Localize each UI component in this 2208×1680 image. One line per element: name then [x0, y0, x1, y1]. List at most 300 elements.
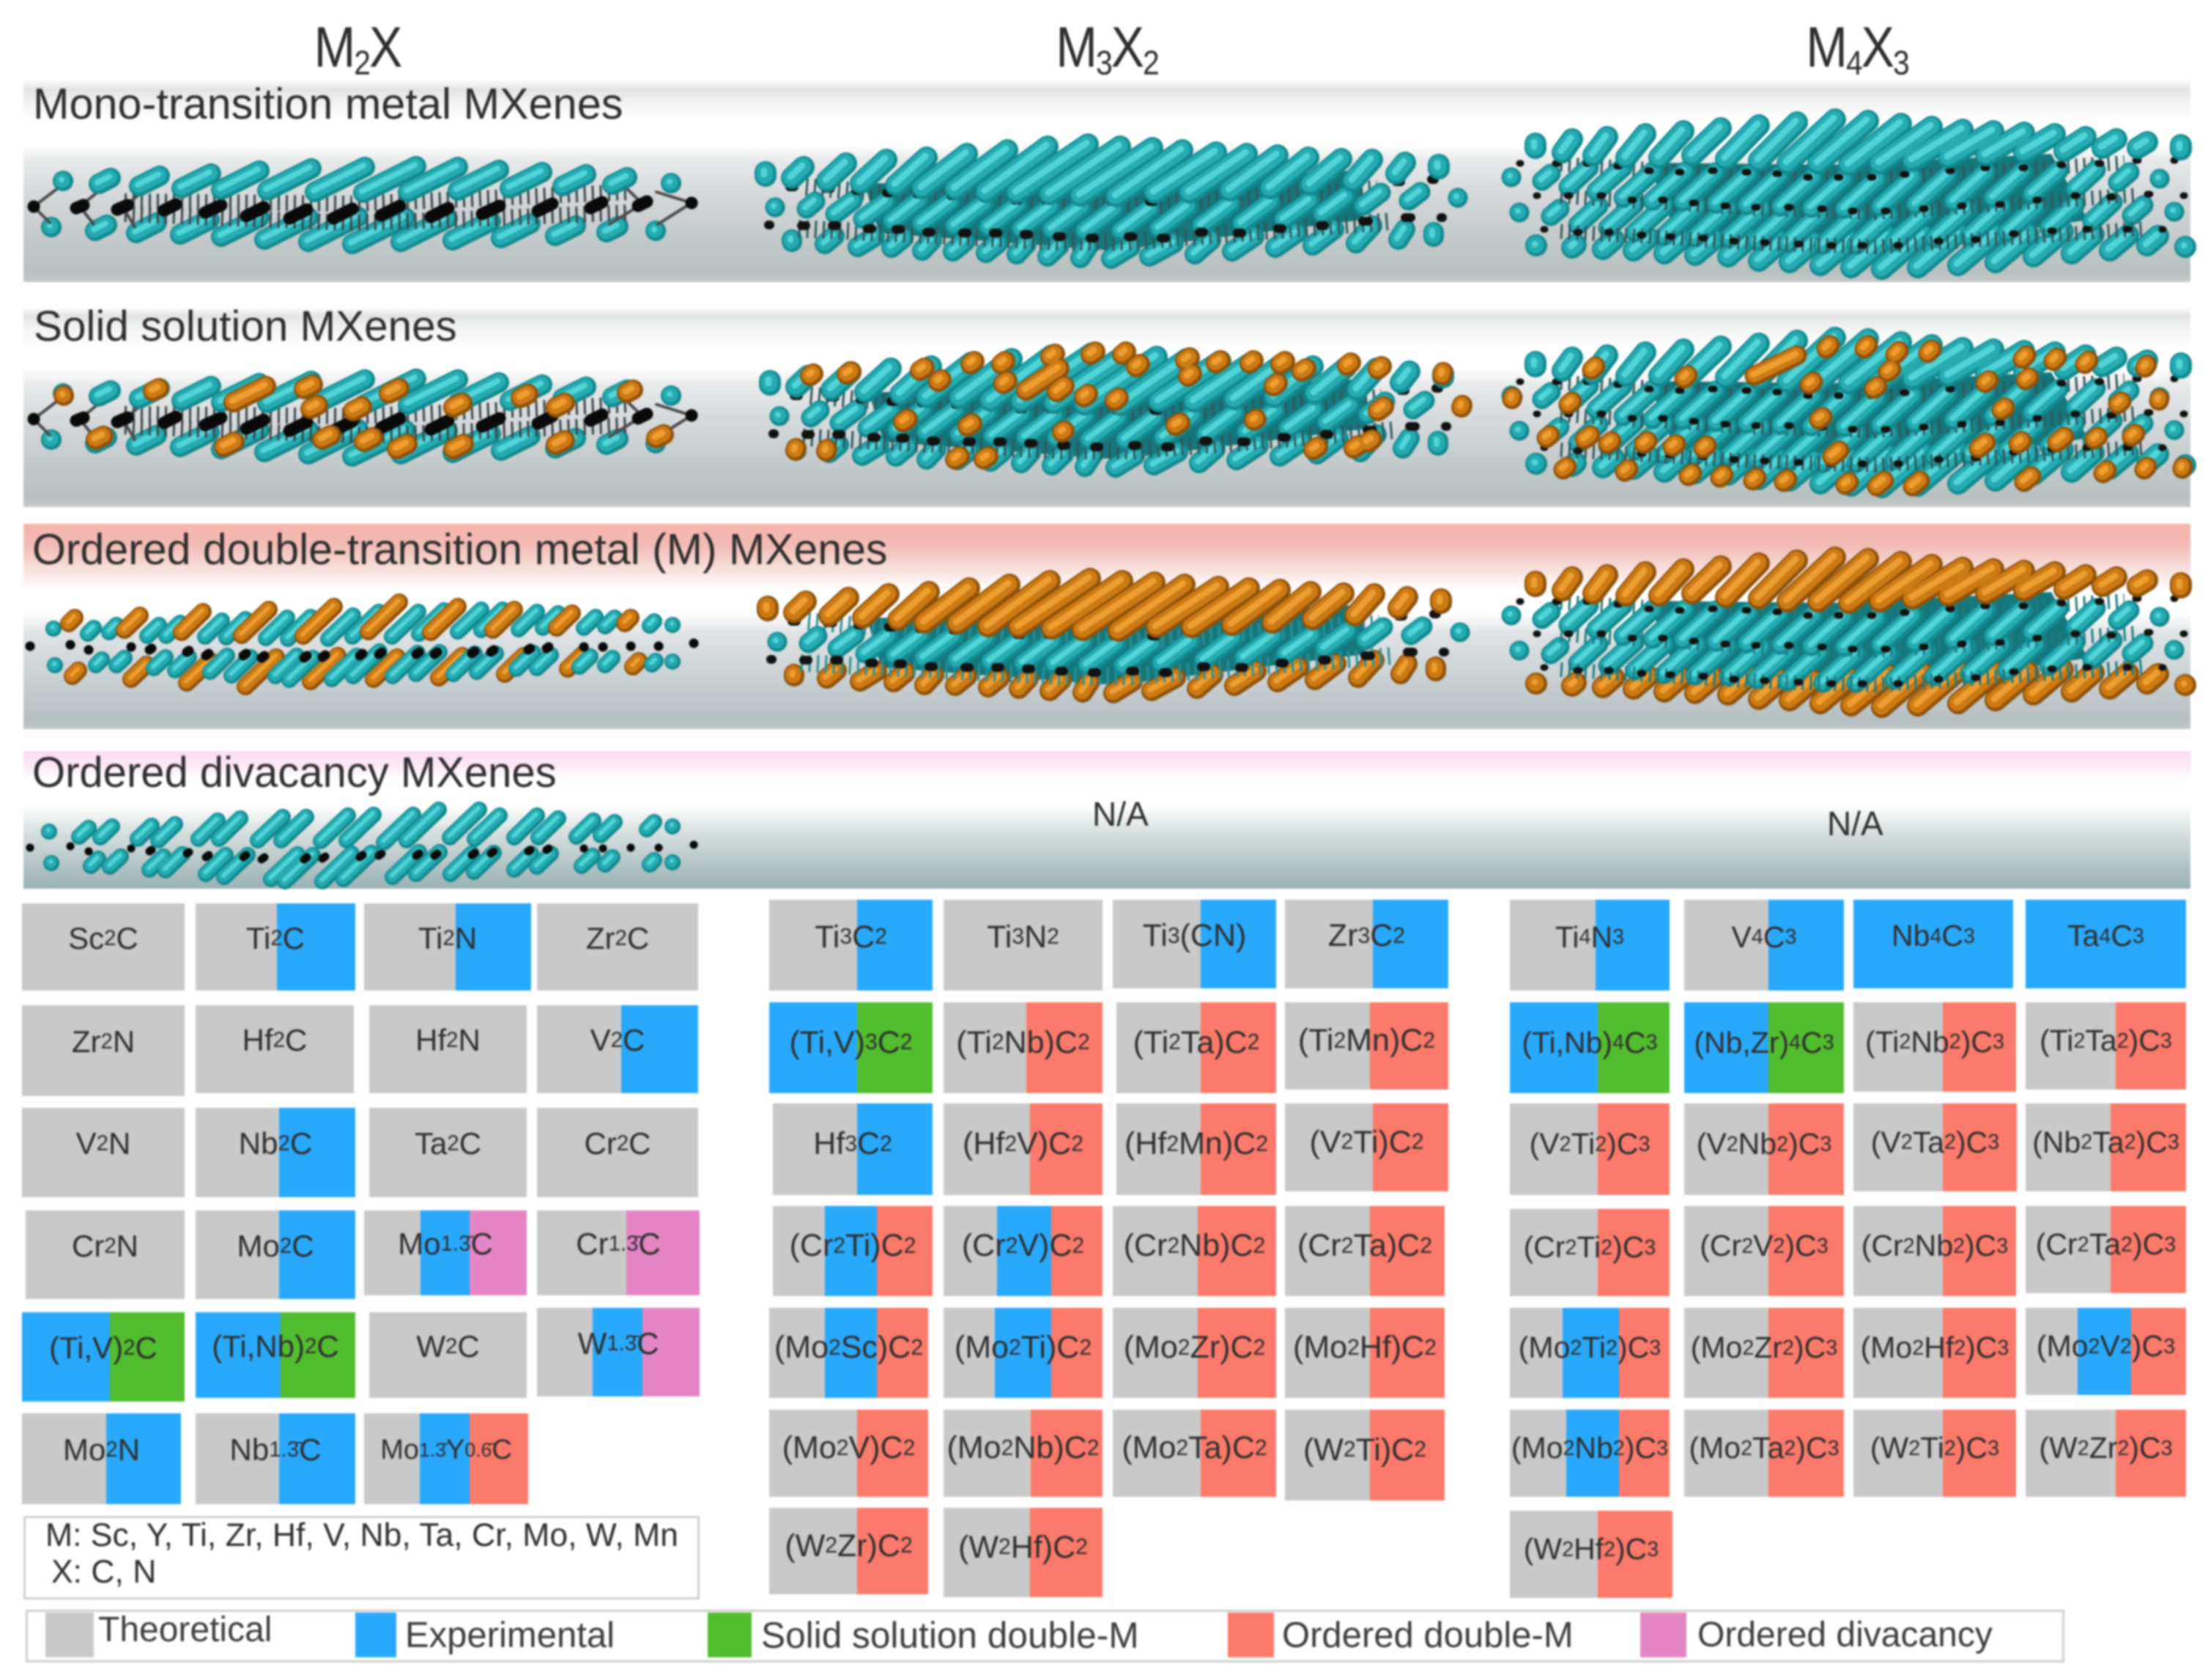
- cell (Cr2Ta2)C3: [2026, 1206, 2186, 1293]
- cell V2C: [537, 1005, 698, 1093]
- cell (Ti,Nb)4C3: (Ti,Nb) C: [1522, 1026, 1646, 1059]
- row heading: ordered double-M: Ordered double-transition metal (M) MXenes: [32, 525, 887, 574]
- cell (W2Hf)C2: (W Hf)C: [958, 1530, 1075, 1565]
- cell (Mo2Nb)C2: [944, 1410, 1103, 1497]
- cell (Ti2Mn)C2: [1285, 1002, 1448, 1089]
- cell Zr3C2: 2: [1393, 923, 1405, 948]
- column heading: M2X: M2X: [314, 16, 401, 82]
- cell (Mo2Hf)C2: (Mo Hf)C: [1293, 1330, 1424, 1365]
- legend: [26, 1610, 2064, 1662]
- cell Mo1.33C: [364, 1210, 527, 1295]
- cell Mo1.33C: 1.3̄: [441, 1232, 470, 1256]
- cell (V2Ti2)C3: 3: [1638, 1133, 1650, 1156]
- cell (Mo2Hf2)C3: [1853, 1308, 2016, 1398]
- structure: ordered divacancy M2X: [30, 808, 694, 881]
- legend swatch: experimental: [355, 1613, 396, 1657]
- cell Mo2N: 2: [105, 1437, 118, 1462]
- cell (Ti2Nb2)C3: (Ti Nb )C: [1865, 1024, 1993, 1058]
- cell (Nb2Ta2)C3: [2026, 1103, 2186, 1191]
- cell (Mo2Hf2)C3: (Mo Hf )C: [1861, 1331, 1997, 1364]
- legend swatch: ordered double-M: [1228, 1613, 1274, 1657]
- cell (Cr2Ti2)C3: [1510, 1209, 1670, 1296]
- row band: solid solution MXenes: [23, 307, 2190, 507]
- cell (Ti2Ta2)C3: 2: [2073, 1029, 2085, 1052]
- cell V2N: 2: [97, 1131, 108, 1155]
- row band: mono-transition metal MXenes: [23, 79, 2190, 282]
- cell Nb4C3: 3: [1963, 925, 1975, 948]
- cell (Ti,Nb)2C: (Ti,Nb) C: [212, 1329, 339, 1363]
- cell (Cr2Nb2)C3: 3: [1996, 1234, 2008, 1257]
- cell (Mo2Zr)C2: 2: [1253, 1335, 1265, 1360]
- cell Nb4C3: Nb C: [1892, 919, 1963, 952]
- cell (W2Ti)C2: [1285, 1410, 1445, 1500]
- cell (Cr2Nb)C2: [1113, 1206, 1276, 1296]
- cell Cr2N: 2: [104, 1234, 116, 1257]
- cell (Hf2Mn)C2: 2: [1166, 1131, 1179, 1156]
- cell (Cr2Ta2)C3: 2: [2078, 1232, 2089, 1256]
- cell (W2Hf)C2: 2: [999, 1535, 1011, 1559]
- cell Ti3N2: Ti N: [987, 919, 1047, 954]
- cell Zr2N: Zr N: [72, 1024, 135, 1059]
- cell (Nb,Zr)4C3: 3: [1823, 1031, 1834, 1054]
- cell (Cr2V2)C3: 2: [1741, 1234, 1753, 1257]
- cell Cr2C: [537, 1108, 698, 1197]
- cell Ti4N3: Ti N: [1555, 920, 1612, 954]
- cell Zr3C2: [1285, 900, 1448, 988]
- info box: M and X elements: [23, 1516, 700, 1599]
- cell Ti3N2: 2: [1047, 925, 1059, 949]
- structure: ordered double-M M2X: [30, 601, 694, 687]
- cell Ti3(CN): 3: [1168, 923, 1180, 948]
- cell Nb4C3: 4: [1930, 925, 1941, 948]
- cell Ti3C2: [769, 900, 933, 991]
- cell (Ti2Ta2)C3: (Ti Ta )C: [2040, 1024, 2160, 1057]
- cell (Mo2Nb2)C3: 2: [1613, 1436, 1625, 1459]
- cell (Nb,Zr)4C3: (Nb,Zr) C: [1694, 1026, 1823, 1059]
- cell (W2Zr)C2: [769, 1508, 928, 1594]
- cell (Cr2V2)C3: 3: [1817, 1234, 1829, 1257]
- cell (W2Hf2)C3: (W Hf )C: [1524, 1532, 1647, 1566]
- cell V2N: V N: [76, 1126, 130, 1161]
- cell Cr2C: Cr C: [584, 1126, 651, 1161]
- cell (Nb2Ta2)C3: (Nb Ta )C: [2032, 1125, 2168, 1159]
- cell (Hf2Mn)C2: [1116, 1103, 1276, 1195]
- cell (Mo2Zr2)C3: 2: [1742, 1336, 1754, 1360]
- cell V2C: 2: [611, 1028, 623, 1052]
- cell (W2Ti2)C3: [1853, 1410, 2016, 1497]
- cell (W2Ti)C2: 2: [1414, 1437, 1426, 1462]
- first row cells M4X3: [1509, 898, 2187, 992]
- cell W1.33C: 1.3̄: [607, 1331, 637, 1355]
- cell Zr2N: [22, 1005, 185, 1096]
- cell (Ti2Nb2)C3: 2: [1899, 1030, 1911, 1054]
- cell (Cr2Ti)C2: [773, 1206, 933, 1296]
- cell Ta4C3: [2026, 900, 2186, 988]
- cell (Ti,V)2C: 2: [123, 1336, 136, 1360]
- cell (Mo2Zr2)C3: 3: [1826, 1336, 1837, 1360]
- cell (Ti,Nb)4C3: 4: [1612, 1031, 1624, 1054]
- atomic structure illustrations: [23, 107, 2198, 891]
- cell Zr2C: 2: [615, 926, 627, 950]
- cell (Ti2Nb2)C3: [1853, 1002, 2016, 1092]
- cell Ti3C2: Ti C: [815, 919, 875, 954]
- cell (Mo2Nb2)C3: [1510, 1410, 1670, 1497]
- cell (W2Ti2)C3: 2: [1944, 1436, 1956, 1459]
- cell (Hf2V)C2: (Hf V)C: [963, 1126, 1071, 1161]
- cell Cr1.33C: Cr C: [576, 1226, 661, 1261]
- cell (W2Zr)C2: 2: [900, 1533, 913, 1558]
- cell V2N: [22, 1108, 185, 1197]
- cell (Cr2Ta2)C3: 3: [2164, 1232, 2176, 1256]
- cell Cr2N: Cr N: [72, 1228, 138, 1263]
- cell (W2Hf2)C3: 2: [1562, 1537, 1574, 1561]
- cell (Ti2Ta2)C3: [2026, 1002, 2186, 1089]
- cell Sc2C: [22, 903, 185, 991]
- cell Ti3N2: [944, 900, 1103, 991]
- structure: mono M2X: [34, 165, 692, 244]
- cell (Mo2Ti)C2: (Mo Ti)C: [955, 1330, 1079, 1365]
- cell (Ti2Nb)C2: 2: [992, 1030, 1004, 1054]
- cell (Cr2Ta2)C3: 2: [2121, 1232, 2133, 1256]
- cell Mo2C: 2: [280, 1234, 292, 1257]
- cell (Cr2Nb)C2: 2: [1167, 1234, 1179, 1257]
- cell (Mo2V2)C3: 2: [2120, 1335, 2132, 1358]
- cell (Ti2Ta2)C3: 2: [2117, 1029, 2129, 1052]
- cell (W2Zr)C2: 2: [825, 1533, 837, 1558]
- cell (Cr2Nb)C2: 2: [1253, 1234, 1265, 1257]
- cell (Ti,Nb)4C3: 3: [1646, 1031, 1658, 1054]
- cell Ti4N3: 3: [1612, 925, 1624, 949]
- text: M elements: M: Sc, Y, Ti, Zr, Hf, V, Nb, Ta, Cr, Mo, W, Mn: [45, 1517, 678, 1553]
- cell (Ti,V)3C2: 2: [900, 1030, 913, 1054]
- cell (Mo2Hf)C2: 2: [1347, 1335, 1360, 1360]
- cell (Ti,V)2C: (Ti,V) C: [49, 1331, 158, 1365]
- cell (W2Zr2)C3: 2: [2117, 1436, 2129, 1459]
- cell W2C: 2: [445, 1333, 457, 1358]
- cell Zr2C: [537, 903, 698, 991]
- cell (V2Ta2)C3: 3: [1987, 1131, 1999, 1154]
- cell (Mo2Ta2)C3: 3: [1828, 1436, 1840, 1459]
- cell (Cr2V2)C3: 2: [1774, 1234, 1785, 1257]
- cell (Mo2Nb)C2: 2: [1001, 1436, 1013, 1459]
- cell (W2Zr2)C3: [2026, 1410, 2186, 1497]
- cell (V2Nb2)C3: [1684, 1103, 1844, 1195]
- cell (Cr2V2)C3: [1684, 1206, 1844, 1296]
- cell (Ti2Ta)C2: 2: [1168, 1030, 1181, 1054]
- cell (Ti2Nb2)C3: 2: [1949, 1030, 1961, 1054]
- structure: mono M3X2: [764, 143, 1458, 259]
- cell W1.33C: [537, 1308, 700, 1396]
- cell (Mo2Ti2)C3: 2: [1606, 1336, 1618, 1360]
- row band: ordered double-transition metal MXenes: [23, 524, 2190, 729]
- cell (Mo2Ti2)C3: 3: [1649, 1336, 1661, 1360]
- cell (W2Zr2)C3: 2: [2078, 1436, 2089, 1459]
- cell (Ti,Nb)2C: 2: [305, 1333, 316, 1358]
- cell (Mo2V2)C3: [2026, 1308, 2186, 1395]
- cell V4C3: [1684, 900, 1844, 991]
- cell Ti3C2: 3: [840, 925, 852, 949]
- cell Ta2C: Ta C: [415, 1126, 481, 1161]
- column heading: M4X3: M4X3: [1806, 16, 1908, 82]
- cell Nb1.33C: 1.3̄: [269, 1437, 299, 1462]
- cell Zr3C2: Zr C: [1328, 918, 1393, 953]
- cell (Mo2Ta2)C3: (Mo Ta )C: [1689, 1431, 1828, 1465]
- cell (Mo2Ti)C2: 2: [1009, 1335, 1021, 1360]
- cell (Nb,Zr)4C3: [1684, 1002, 1844, 1093]
- cell Nb2C: 2: [278, 1131, 290, 1155]
- cell (Cr2Ta2)C3: (Cr Ta )C: [2036, 1227, 2164, 1261]
- cell (Hf2V)C2: [944, 1103, 1103, 1195]
- cell (V2Ti)C2: (V Ti)C: [1309, 1124, 1412, 1159]
- legend swatch: ordered divacancy: [1640, 1613, 1686, 1657]
- cell (Mo2Sc)C2: (Mo Sc)C: [774, 1330, 911, 1365]
- cell (W2Hf)C2: [944, 1508, 1103, 1597]
- cell (Cr2V)C2: [944, 1206, 1103, 1296]
- cell Ti2N: [364, 903, 531, 991]
- cell (V2Ti2)C3: [1510, 1103, 1670, 1195]
- cell (Cr2Ti2)C3: (Cr Ti )C: [1524, 1230, 1644, 1264]
- cell (Mo2Sc)C2: 2: [829, 1335, 841, 1360]
- structure: solid solution M2X: [34, 377, 692, 456]
- cell (V2Nb2)C3: 2: [1727, 1133, 1738, 1156]
- cell Ti3C2: 2: [875, 925, 887, 949]
- cell (Hf2V)C2: 2: [1071, 1131, 1083, 1156]
- legend label: ordered divacancy: Ordered divacancy: [1697, 1616, 1993, 1654]
- cell Ti2N: Ti N: [418, 920, 477, 955]
- cell (V2Ti2)C3: 2: [1595, 1133, 1607, 1156]
- cell Ta4C3: 4: [2099, 925, 2111, 948]
- cell Mo1.33Y0.67C: Mo Y C: [380, 1435, 512, 1465]
- cell (W2Hf2)C3: 3: [1647, 1537, 1659, 1561]
- cell Cr2N: [26, 1210, 185, 1299]
- cell (W2Hf2)C3: 2: [1604, 1537, 1615, 1561]
- cell Mo1.33C: Mo C: [398, 1226, 493, 1261]
- cell Ti4N3: [1510, 900, 1670, 991]
- cell (Cr2Nb2)C3: 2: [1953, 1234, 1965, 1257]
- cell (Mo2Ti)C2: [944, 1308, 1103, 1398]
- cell (Nb,Zr)4C3: 4: [1789, 1031, 1801, 1054]
- cell (Mo2V)C2: (Mo V)C: [782, 1430, 903, 1465]
- cell (Ti,Nb)4C3: [1510, 1002, 1670, 1093]
- cell (Nb2Ta2)C3: 2: [2081, 1131, 2092, 1154]
- cell (Ti2Nb)C2: 2: [1078, 1030, 1090, 1054]
- cell (Cr2Ti)C2: 2: [904, 1234, 916, 1257]
- cell (W2Ti2)C3: 3: [1987, 1436, 1999, 1459]
- cell Ti2C: Ti C: [246, 920, 305, 955]
- cell Sc2C: Sc C: [68, 920, 138, 955]
- cell (Ti2Ta)C2: 2: [1248, 1030, 1259, 1054]
- cell (Hf2V)C2: 2: [1004, 1131, 1017, 1156]
- cell (Mo2Nb2)C3: 2: [1563, 1436, 1574, 1459]
- cell (Cr2Ti2)C3: 2: [1566, 1235, 1577, 1259]
- text: X elements: X: C, N: [51, 1554, 156, 1590]
- cell Hf3C2: [773, 1103, 933, 1195]
- cell (Cr2Nb2)C3: [1853, 1206, 2016, 1296]
- cell (Ti2Ta)C2: (Ti Ta)C: [1133, 1024, 1248, 1059]
- cell (Cr2Nb2)C3: 2: [1903, 1234, 1915, 1257]
- cell (Cr2Ti2)C3: 2: [1601, 1235, 1612, 1259]
- cell Mo1.33Y0.67C: 0.6̄: [464, 1439, 492, 1461]
- cell (Cr2Ti)C2: (Cr Ti)C: [790, 1228, 904, 1263]
- cell (Mo2Hf)C2: 2: [1424, 1335, 1437, 1360]
- cell (Mo2Zr)C2: (Mo Zr)C: [1124, 1330, 1253, 1365]
- cell Hf2C: [196, 1005, 354, 1093]
- cell (V2Ta2)C3: [1853, 1103, 2017, 1191]
- cell (Mo2Sc)C2: 2: [911, 1335, 923, 1360]
- cell (Ti2Ta2)C3: 3: [2160, 1029, 2172, 1052]
- cell (Cr2Ti2)C3: 3: [1644, 1235, 1656, 1259]
- cell W1.33C: W C: [578, 1326, 659, 1360]
- cell W2C: W C: [416, 1329, 480, 1363]
- structure: solid solution M4X3: [1510, 336, 2185, 487]
- cell (V2Ti)C2: 2: [1412, 1130, 1424, 1154]
- cell V4C3: 4: [1752, 925, 1763, 949]
- cell (Mo2Zr2)C3: (Mo Zr )C: [1691, 1331, 1826, 1364]
- cell (Mo2Ti)C2: 2: [1079, 1335, 1092, 1360]
- legend label: experimental: Experimental: [405, 1616, 615, 1655]
- cell (Cr2Nb2)C3: (Cr Nb )C: [1861, 1229, 1996, 1262]
- first row cells M3X2: [768, 898, 1450, 992]
- cell (Mo2Hf2)C3: 2: [1954, 1336, 1966, 1360]
- cell (Ti2Mn)C2: 2: [1333, 1029, 1346, 1052]
- cell Cr2C: 2: [617, 1131, 629, 1155]
- cell (Mo2Ta2)C3: 2: [1741, 1436, 1752, 1459]
- cell Zr2C: Zr C: [586, 920, 649, 955]
- cell (Ti2Nb2)C3: 3: [1993, 1030, 2004, 1054]
- cell (V2Ta2)C3: 2: [1901, 1131, 1913, 1154]
- cell (Mo2Nb)C2: 2: [1087, 1436, 1099, 1459]
- cell Ta2C: 2: [447, 1131, 459, 1155]
- legend swatch: solid solution: [708, 1613, 752, 1657]
- cell (Mo2Ta)C2: (Mo Ta)C: [1122, 1430, 1255, 1465]
- cell V4C3: V C: [1732, 920, 1785, 954]
- cell Hf3C2: Hf C: [813, 1126, 880, 1161]
- cell Mo2N: [22, 1413, 181, 1504]
- cell (Ti2Mn)C2: (Ti Mn)C: [1298, 1023, 1423, 1058]
- cell Nb1.33C: [196, 1413, 355, 1504]
- N/A label M4X3: N/A: [1827, 804, 1883, 843]
- cell Mo1.33Y0.67C: [364, 1413, 528, 1504]
- cell Hf2N: Hf N: [415, 1023, 481, 1057]
- legend label: ordered double-M: Ordered double-M: [1282, 1616, 1574, 1655]
- cell Zr3C2: 3: [1358, 923, 1370, 948]
- cell (V2Ti)C2: 2: [1341, 1130, 1353, 1154]
- cell W2C: [369, 1312, 527, 1398]
- cell (Mo2Ta)C2: 2: [1255, 1436, 1267, 1459]
- cell (W2Ti2)C3: (W Ti )C: [1870, 1431, 1987, 1465]
- structure: solid solution M3X2: [768, 350, 1462, 467]
- cell Ti4N3: 4: [1579, 925, 1591, 949]
- cell Hf2C: 2: [273, 1028, 285, 1052]
- cell (Mo2Hf)C2: [1285, 1308, 1445, 1398]
- cell (Mo2Sc)C2: [769, 1308, 928, 1398]
- cell (Mo2Ti2)C3: 2: [1570, 1336, 1582, 1360]
- row heading: solid solution: Solid solution MXenes: [34, 303, 457, 350]
- row band: ordered divacancy MXenes: [23, 751, 2190, 889]
- cell (Nb2Ta2)C3: 2: [2124, 1131, 2136, 1154]
- cell (W2Ti2)C3: 2: [1908, 1436, 1920, 1459]
- cell Nb4C3: [1853, 900, 2013, 988]
- cell (Mo2V2)C3: 3: [2163, 1335, 2175, 1358]
- cell (Mo2Nb2)C3: 3: [1656, 1436, 1668, 1459]
- structure: ordered double-M M3X2: [766, 577, 1460, 693]
- cell (Ti2Mn)C2: 2: [1423, 1029, 1435, 1052]
- cell (Hf2Mn)C2: 2: [1256, 1131, 1268, 1156]
- cell Ti3(CN): [1113, 900, 1276, 988]
- cell (Mo2Hf2)C3: 2: [1912, 1336, 1924, 1360]
- cell (Ti2Nb)C2: [944, 1002, 1103, 1093]
- cell (Mo2V)C2: 2: [837, 1436, 848, 1459]
- cell (Cr2V)C2: (Cr V)C: [962, 1228, 1072, 1263]
- cell (Mo2Hf2)C3: 3: [1997, 1336, 2009, 1360]
- column heading: M3X2: M3X2: [1056, 16, 1158, 82]
- cell (W2Zr2)C3: (W Zr )C: [2039, 1431, 2161, 1465]
- legend label: theoretical: Theoretical: [98, 1610, 272, 1649]
- structure: ordered double-M M4X3: [1510, 556, 2185, 707]
- cell (Cr2Ta)C2: [1285, 1206, 1445, 1296]
- cell (Ti,V)2C: [22, 1312, 185, 1402]
- row heading: ordered divacancy: Ordered divacancy MXenes: [32, 749, 557, 796]
- cell (Mo2Nb)C2: (Mo Nb)C: [947, 1430, 1087, 1465]
- cell (V2Ti2)C3: (V Ti )C: [1530, 1127, 1638, 1161]
- cell (V2Ta2)C3: 2: [1944, 1131, 1956, 1154]
- M2X composition grid: [21, 902, 701, 1506]
- cell Nb2C: [196, 1108, 355, 1197]
- cell (Cr2Ta)C2: 2: [1341, 1234, 1353, 1257]
- cell Hf2C: Hf C: [242, 1023, 307, 1057]
- structure: mono M4X3: [1510, 118, 2185, 269]
- cell (W2Hf2)C3: [1510, 1511, 1672, 1598]
- cell (Mo2Ta2)C3: 2: [1784, 1436, 1796, 1459]
- cell Mo1.33Y0.67C: 1.3̄: [419, 1439, 446, 1461]
- cell Ti3N2: 3: [1012, 925, 1024, 949]
- cell (Mo2Zr2)C3: [1684, 1308, 1844, 1398]
- cell (V2Nb2)C3: 3: [1820, 1133, 1831, 1156]
- cell (W2Ti)C2: (W Ti)C: [1303, 1432, 1414, 1467]
- cell (Cr2Ti)C2: 2: [833, 1234, 845, 1257]
- legend label: solid solution: Solid solution double-M: [761, 1615, 1139, 1656]
- cell Sc2C: 2: [104, 926, 116, 950]
- cell (Mo2Ta)C2: 2: [1176, 1436, 1188, 1459]
- cell (Ti2Ta)C2: [1116, 1002, 1276, 1093]
- legend swatch: theoretical: [45, 1613, 94, 1657]
- cell Nb2C: Nb C: [239, 1126, 312, 1161]
- cell Hf3C2: 2: [880, 1131, 892, 1156]
- cell V4C3: 3: [1785, 925, 1796, 949]
- cell (Ti,V)3C2: (Ti,V) C: [789, 1024, 900, 1059]
- cell (Ti,V)3C2: 3: [865, 1030, 878, 1054]
- cell V2C: V C: [590, 1023, 645, 1057]
- cell (Mo2Ta)C2: [1113, 1410, 1276, 1497]
- cell (Cr2Ta)C2: (Cr Ta)C: [1297, 1228, 1420, 1263]
- cell Cr1.33C: 1.3̄: [609, 1232, 638, 1256]
- cell (V2Ta2)C3: (V Ta )C: [1871, 1125, 1987, 1159]
- cell (W2Hf)C2: 2: [1075, 1535, 1088, 1559]
- cell Ta4C3: Ta C: [2067, 919, 2133, 952]
- cell (Mo2Zr)C2: 2: [1178, 1335, 1190, 1360]
- cell (Mo2Ti2)C3: [1510, 1308, 1670, 1398]
- cell (Ti2Nb)C2: (Ti Nb)C: [956, 1024, 1078, 1059]
- cell (Mo2V)C2: [769, 1410, 928, 1497]
- cell (Mo2V2)C3: (Mo V )C: [2037, 1329, 2163, 1363]
- cell Cr1.33C: [537, 1210, 700, 1295]
- cell (Mo2Nb2)C3: (Mo Nb )C: [1511, 1431, 1656, 1465]
- cell Zr2N: 2: [100, 1029, 113, 1054]
- cell (Cr2Nb)C2: (Cr Nb)C: [1124, 1228, 1253, 1263]
- cell Hf2N: 2: [446, 1028, 459, 1052]
- cell (Nb2Ta2)C3: 3: [2168, 1131, 2179, 1154]
- cell (Mo2V)C2: 2: [903, 1436, 915, 1459]
